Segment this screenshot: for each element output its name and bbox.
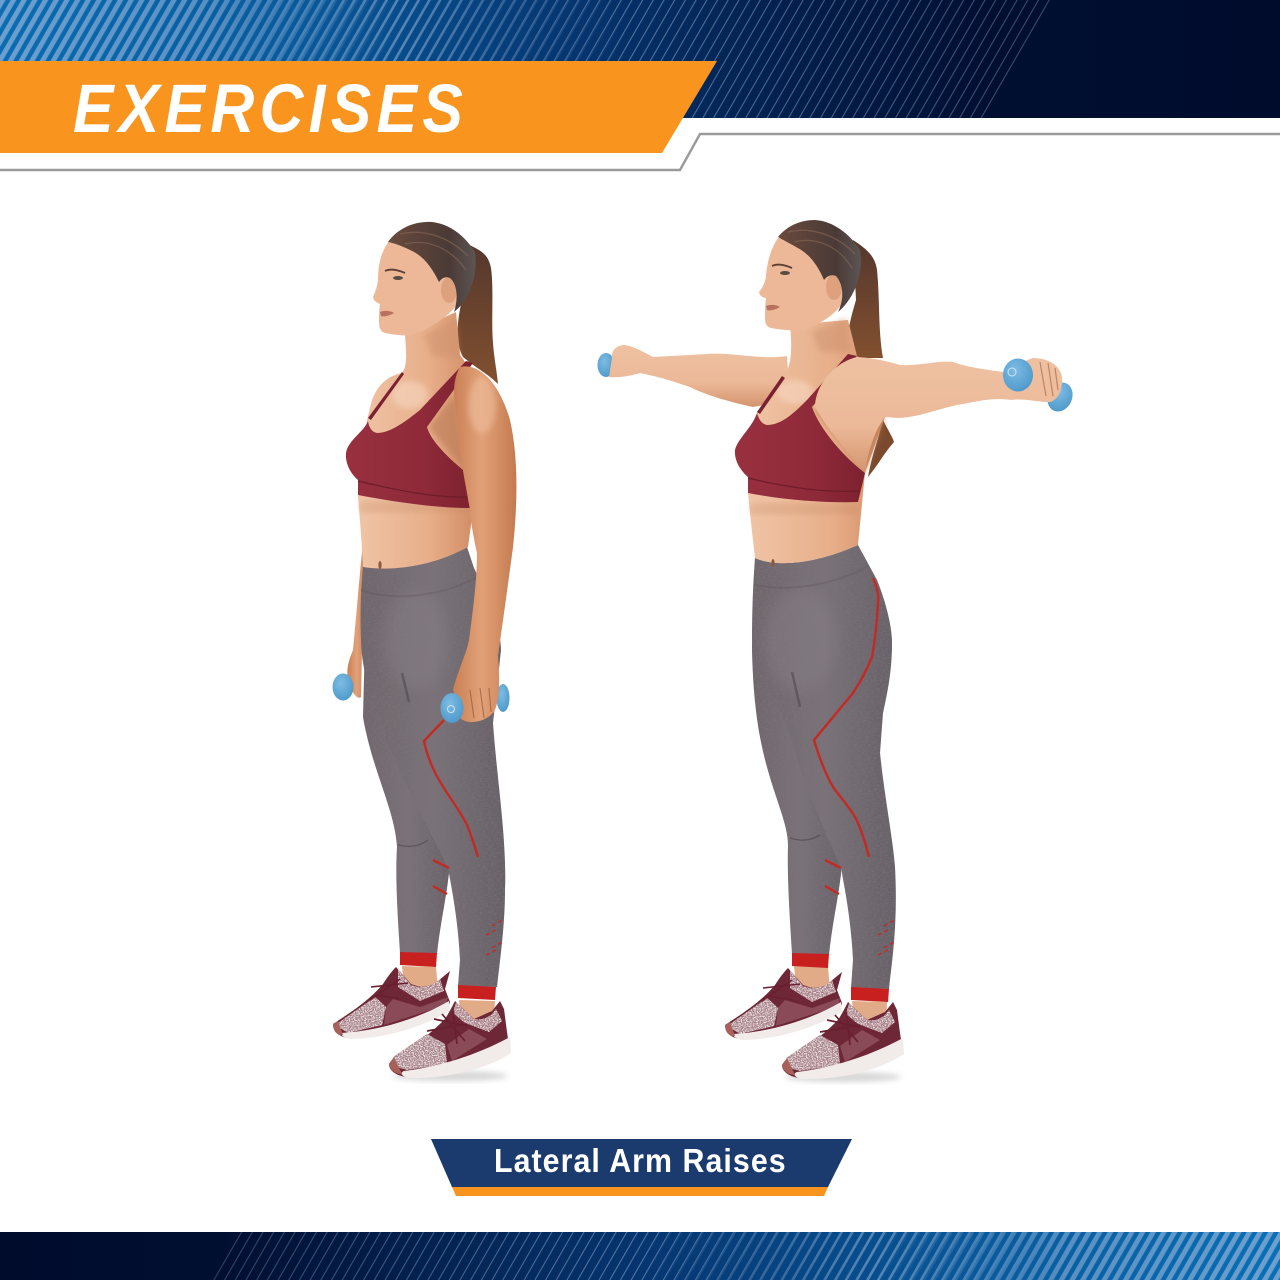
near ankle xyxy=(852,1001,887,1030)
header white notch xyxy=(0,118,1280,168)
far cuff xyxy=(400,952,437,967)
far dumbbell xyxy=(332,674,354,700)
near ankle xyxy=(459,1000,495,1030)
exercise caption xyxy=(431,1139,852,1196)
near dumbbell xyxy=(1003,358,1033,392)
title: EXERCISES xyxy=(73,69,463,147)
near leg and hips xyxy=(361,547,505,987)
near cuff xyxy=(851,987,889,1002)
far ankle xyxy=(794,966,830,990)
far shoe xyxy=(333,967,450,1039)
near cuff xyxy=(458,985,496,1000)
hair cap xyxy=(778,220,861,312)
figure: woman at rest, arms down xyxy=(332,222,516,1081)
arm shading xyxy=(468,377,496,718)
far shoe xyxy=(725,968,842,1040)
figure: woman with arms raised sideways xyxy=(598,220,1077,1082)
leg seams xyxy=(424,720,502,955)
ear xyxy=(826,274,842,300)
bra band seam xyxy=(748,478,860,491)
near shoe xyxy=(782,1002,904,1079)
leggings shading xyxy=(361,578,476,846)
torso skin xyxy=(358,312,478,569)
far arm and hand xyxy=(347,543,368,698)
far ankle xyxy=(402,966,438,990)
sports bra xyxy=(735,354,865,502)
lips xyxy=(380,311,394,316)
footer band with diagonal stripes xyxy=(0,1232,1280,1280)
shoe shadow xyxy=(785,1072,901,1082)
title banner xyxy=(0,61,717,153)
far cuff xyxy=(792,953,829,968)
eye xyxy=(393,276,403,280)
head xyxy=(759,220,861,330)
far arm xyxy=(609,345,790,407)
near arm and hand xyxy=(815,357,1062,473)
torso shading xyxy=(360,318,468,569)
caption text: Lateral Arm Raises xyxy=(494,1142,786,1179)
leggings shading xyxy=(754,566,868,840)
eyebrow xyxy=(772,265,792,268)
ponytail xyxy=(458,244,498,384)
caption accent bar xyxy=(452,1187,828,1196)
shoe shadow xyxy=(392,1071,508,1081)
head xyxy=(373,222,476,335)
header outline rule xyxy=(0,134,1280,170)
hair strands xyxy=(788,230,855,268)
leg seams xyxy=(814,578,894,955)
far dumbbell xyxy=(598,353,614,377)
ponytail below arm xyxy=(868,420,894,477)
ponytail xyxy=(847,240,883,358)
bra band seam xyxy=(358,481,469,497)
eye xyxy=(780,271,790,275)
far leg xyxy=(363,640,455,954)
finger lines xyxy=(1040,362,1058,396)
near dumbbell xyxy=(440,693,464,723)
face xyxy=(759,238,846,330)
sports bra xyxy=(346,361,473,508)
torso skin xyxy=(748,320,890,563)
far bra strap xyxy=(757,376,785,414)
near shoe xyxy=(389,1001,511,1078)
header band with diagonal stripes xyxy=(0,0,1280,118)
torso shading xyxy=(750,318,885,567)
eyebrow xyxy=(385,270,405,273)
far shoulder strap xyxy=(368,372,404,420)
hair cap xyxy=(388,222,476,312)
far leg xyxy=(752,650,848,955)
hair strands xyxy=(400,232,468,270)
dumbbell far end near hand xyxy=(496,684,510,712)
lips xyxy=(766,305,780,310)
dumbbell far end xyxy=(1043,378,1077,416)
ear xyxy=(441,277,457,303)
near leg and hips xyxy=(752,545,896,989)
face xyxy=(373,240,460,335)
near arm and hand xyxy=(453,366,516,722)
